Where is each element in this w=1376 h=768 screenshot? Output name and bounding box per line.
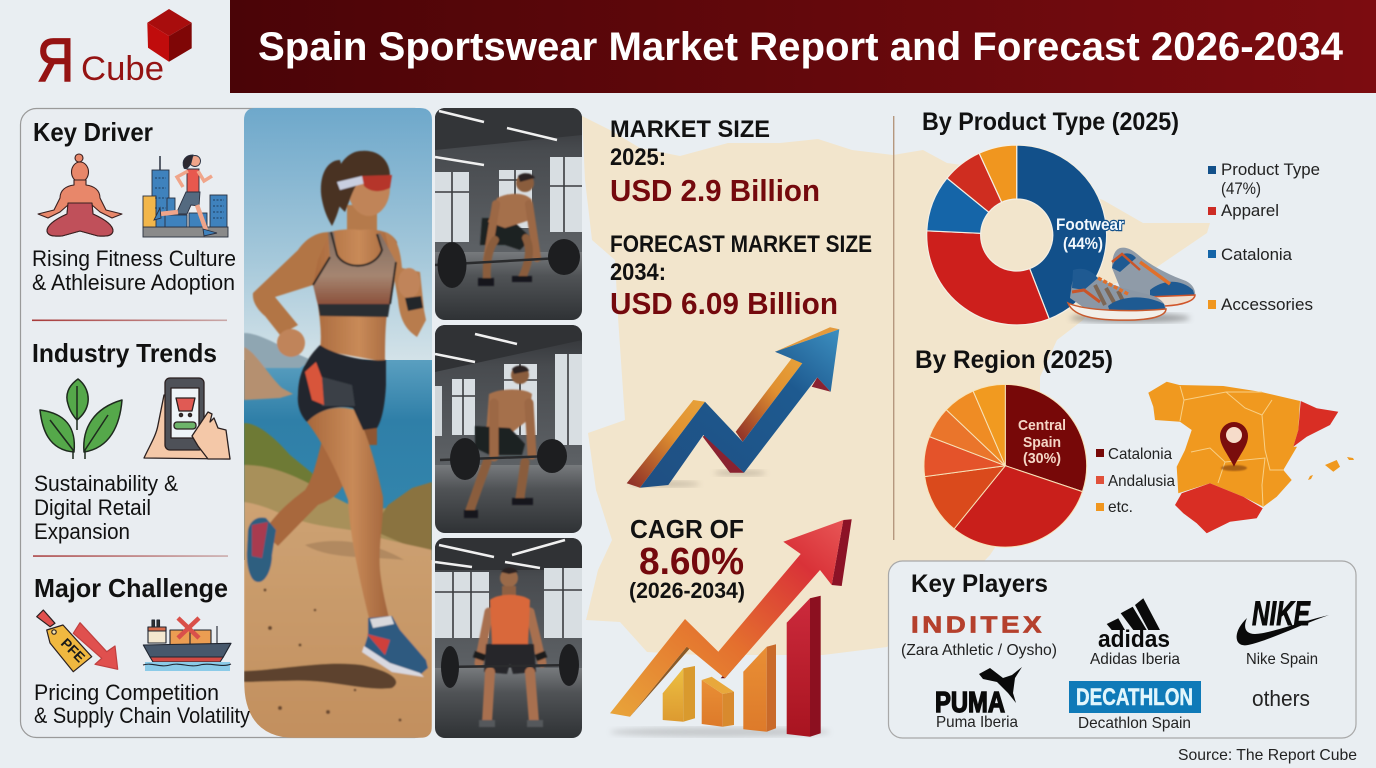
heading: by region: By Region (2025): [915, 346, 1113, 374]
forecast market size 2034: 2034:: [610, 259, 666, 286]
map: Spain regions: [1148, 382, 1354, 533]
legend: region: Andalusia: [1108, 473, 1175, 490]
logo letter: Я: [37, 26, 74, 94]
heading: key players: Key Players: [911, 570, 1048, 598]
logo: inditex: (Zara Athletic / Oysho): [901, 642, 1057, 659]
icon: meditation: [38, 154, 122, 236]
logo: puma: Puma Iberia: [936, 714, 1018, 731]
icon: falling price tag: [37, 610, 118, 672]
forecast market size 2034: FORECAST MARKET SIZE: [610, 231, 872, 258]
logo: inditex: [901, 612, 1057, 659]
market size 2025: 2025:: [610, 144, 666, 171]
text: pricing: Pricing Competition: [34, 680, 219, 705]
arrow: blue growth: [627, 327, 839, 488]
icon: leaves: [40, 379, 122, 459]
shorts: [298, 345, 386, 430]
cagr callout: (2026-2034): [629, 578, 745, 603]
logo: nike: NIKE: [1252, 595, 1311, 633]
heading: industry trends: Industry Trends: [32, 338, 217, 368]
icon: phone shopping: [144, 378, 230, 459]
forecast market size 2034: [610, 231, 872, 321]
background map of Spain: [582, 116, 1210, 655]
text: sustainability: [34, 471, 178, 544]
logo: adidas: adidas: [1098, 626, 1170, 653]
icon: location pin: [1220, 422, 1248, 471]
text: sustainability: Sustainability &: [34, 471, 178, 496]
vertical divider: [893, 116, 894, 540]
front leg: [307, 408, 390, 622]
neck and torso: [347, 205, 377, 234]
label: central spain share: Spain: [1023, 434, 1061, 451]
logo: decathlon: Decathlon Spain: [1078, 715, 1191, 732]
logo word: Cube: [81, 50, 164, 88]
icon: falling price tag: PFE: [58, 635, 88, 665]
label: footwear share: (44%): [1063, 234, 1103, 253]
photo: gym lift two: [435, 325, 582, 533]
logo: decathlon: DECATHLON: [1076, 684, 1193, 711]
logo: puma: [935, 667, 1022, 731]
source note: Source: The Report Cube: [1178, 747, 1357, 764]
icon: cargo ship: [143, 618, 231, 671]
logo: puma: PUMA: [935, 687, 1005, 719]
label: central spain share: Central: [1018, 417, 1066, 434]
logo cube: [147, 9, 192, 62]
ponytail: [321, 160, 344, 226]
back leg: [270, 443, 344, 546]
heading: key driver: Key Driver: [33, 117, 153, 147]
sports top: [313, 232, 396, 305]
logo: decathlon: [1069, 681, 1201, 732]
head: [349, 183, 391, 216]
logo: inditex: INDITEX: [911, 612, 1045, 638]
legend: region: Catalonia: [1108, 446, 1172, 463]
cagr callout: [629, 514, 745, 603]
text: others: others: [1252, 686, 1310, 711]
icon: running shoes: [1068, 248, 1195, 323]
photo: runner: [244, 108, 432, 738]
title banner: [230, 0, 1376, 93]
label: footwear share: Footwear: [1056, 215, 1124, 234]
legend: product type: (47%): [1221, 179, 1261, 198]
label: central spain share: [1018, 417, 1066, 467]
forecast market size 2034: USD 6.09 Billion: [610, 286, 838, 321]
market size 2025: [610, 116, 820, 208]
logo: adidas: Adidas Iberia: [1090, 651, 1180, 668]
label: footwear share: [1056, 215, 1124, 253]
logo: nike: Nike Spain: [1246, 651, 1318, 668]
legend: region: [1096, 446, 1175, 516]
logo: adidas: [1090, 598, 1180, 668]
text: rising fitness: & Athleisure Adoption: [32, 270, 235, 295]
bar chart with red growth arrow: [610, 519, 852, 737]
text: rising fitness: Rising Fitness Culture: [32, 246, 236, 271]
legend: region: etc.: [1108, 499, 1133, 516]
legend: product type: [1208, 160, 1320, 314]
market size 2025: USD 2.9 Billion: [610, 173, 820, 208]
donut chart: product type: [927, 145, 1107, 325]
text: sustainability: Digital Retail: [34, 495, 151, 520]
cagr callout: CAGR OF: [630, 514, 744, 544]
text: sustainability: Expansion: [34, 519, 130, 544]
legend: product type: Apparel: [1221, 201, 1279, 220]
title: Spain Sportswear Market Report and Forecast 2026-2034: [258, 25, 1344, 69]
icon: city runner: [143, 155, 228, 237]
legend: product type: Accessories: [1221, 295, 1313, 314]
market size 2025: MARKET SIZE: [610, 116, 770, 143]
photo: gym lift one: [435, 108, 582, 320]
text: supply chain: & Supply Chain Volatility: [34, 703, 250, 728]
arms: [253, 232, 330, 335]
legend: product type: Product Type: [1221, 160, 1320, 179]
photo: gym lift three: [435, 538, 582, 738]
panel: left drivers: [20, 108, 430, 738]
heading: by product type: By Product Type (2025): [922, 108, 1179, 136]
label: central spain share: (30%): [1023, 450, 1061, 467]
legend: product type: Catalonia: [1221, 245, 1293, 264]
pie chart: region: [924, 384, 1087, 547]
text: rising fitness: [32, 246, 236, 295]
logo: [37, 9, 192, 94]
cagr callout: 8.60%: [639, 541, 744, 583]
panel: key players: [888, 561, 1356, 738]
logo: nike: [1237, 595, 1329, 668]
heading: major challenge: Major Challenge: [34, 573, 228, 603]
